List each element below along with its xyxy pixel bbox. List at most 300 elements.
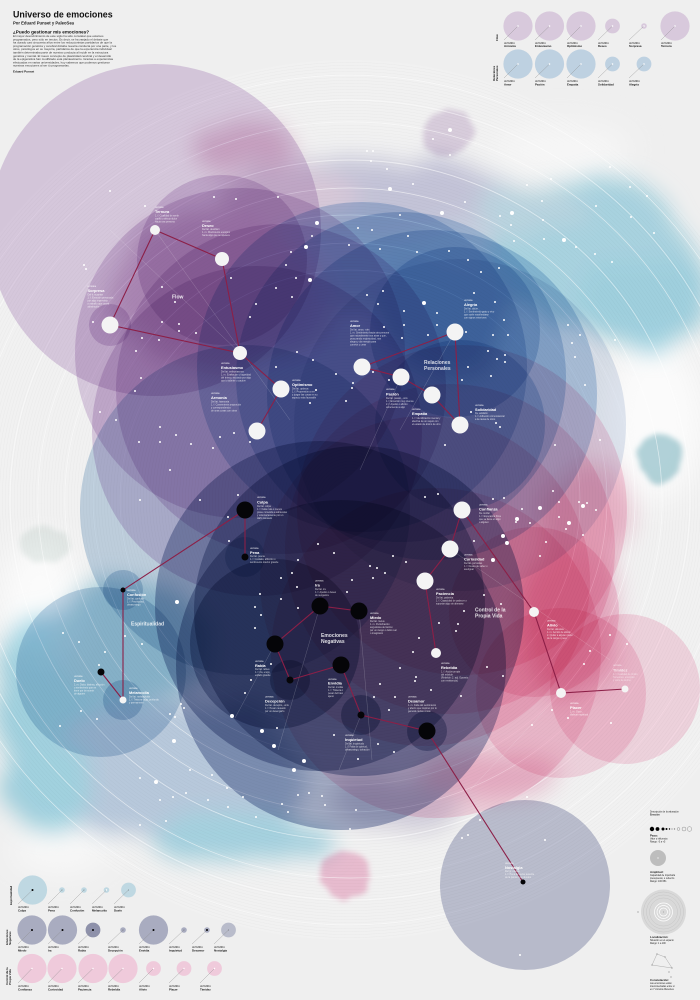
label: Inquietud: 1. f. Falta de quietud, bbox=[345, 746, 368, 748]
label: Amor: convivir y crear bbox=[350, 344, 366, 346]
label: Duelo: 1. m. Dolor, lástima, aflicción bbox=[74, 684, 105, 686]
label: Nostalgia: Nostalgia bbox=[505, 865, 523, 870]
label: Inquietud bbox=[345, 734, 370, 752]
label: Miedo: angustiosa del ánimo bbox=[370, 626, 393, 629]
row label: Control de la Propia Vida: Control de la bbox=[5, 967, 9, 985]
label: Alegría: LEYENDA bbox=[464, 299, 473, 302]
label: Melancolía: Del lat. melancholia bbox=[129, 696, 151, 698]
negativas mini labels: LEYENDA bbox=[48, 946, 59, 949]
label: Optimismo: LEYENDA bbox=[292, 379, 301, 382]
label: Curiosidad: Curiosidad bbox=[464, 556, 485, 562]
espiritualidad mini labels: Melancolía bbox=[92, 908, 107, 912]
label: Melancolía: y permanente bbox=[129, 702, 144, 704]
label: Rabia: LEYENDA bbox=[255, 660, 264, 663]
negativas mini labels: LEYENDA bbox=[78, 946, 89, 949]
constellation note: interconectadas entre sí bbox=[650, 985, 675, 988]
row label: Relaciones Personales: Relaciones bbox=[492, 66, 496, 81]
flow mini labels: LEYENDA bbox=[629, 42, 640, 45]
amplitude circle bbox=[650, 850, 666, 866]
label: Culpa: y voluntariamente por un bbox=[257, 514, 284, 517]
negativas mini labels: LEYENDA bbox=[192, 946, 203, 949]
negativas mini labels: Miedo bbox=[18, 948, 27, 952]
negativas mini labels: LEYENDA bbox=[169, 946, 180, 949]
label: Culpa: Del lat. culpa bbox=[257, 505, 271, 508]
label: Desamor: LEYENDA bbox=[408, 696, 417, 698]
negativas mini labels: LEYENDA bbox=[214, 946, 225, 949]
label: Relaciones Personales: Personales bbox=[424, 366, 451, 372]
constellation note: Las emociones están bbox=[650, 982, 672, 985]
label: Alegría: Del lat. alicer bbox=[464, 308, 478, 310]
label: Paciencia bbox=[436, 588, 467, 606]
circles: flow bbox=[0, 64, 446, 596]
relaciones mini labels: Pasión bbox=[535, 82, 545, 86]
label: Sorpresa: por algo imprevisto bbox=[88, 300, 108, 302]
title block bbox=[13, 10, 117, 74]
label: Deseo bbox=[202, 220, 231, 237]
label: Pena: 1. f. Cuidado, aflicción o bbox=[250, 558, 276, 561]
label: Amor: que naturalmente nos atrae y que, bbox=[350, 334, 387, 338]
label: Miedo bbox=[370, 612, 397, 635]
label: Ira: Ira bbox=[315, 582, 321, 588]
negativas mini labels bbox=[18, 946, 227, 952]
row label: Emociones Negativas: Negativas bbox=[8, 931, 12, 945]
legend: how to read bbox=[637, 810, 692, 991]
label: Amor: LEYENDA bbox=[350, 320, 359, 323]
label: Empatía: afectiva de un sujeto con bbox=[412, 420, 439, 423]
relaciones mini labels bbox=[504, 80, 640, 86]
label: Sorpresa: 1. f. Emoción provocada bbox=[88, 296, 114, 300]
label: Optimismo: Optimismo bbox=[292, 382, 313, 387]
label: Confusión: desasosiego bbox=[127, 604, 141, 606]
relaciones mini labels: LEYENDA bbox=[629, 80, 640, 83]
label: Envidia: Del lat. invidia bbox=[328, 686, 344, 689]
negativas mini labels: LEYENDA bbox=[18, 946, 29, 949]
flow note text: Rango: -5 a +5 bbox=[650, 842, 666, 844]
label: Envidia: pesar del bien bbox=[328, 692, 344, 695]
constellation: emociones negativas y espiritualidad bbox=[101, 510, 523, 882]
label: Confianza bbox=[479, 504, 502, 524]
espiritualidad mini labels: LEYENDA bbox=[114, 906, 125, 909]
star nodes bbox=[98, 225, 628, 884]
intro text: nuestras emociones al ser tú programarlas. bbox=[13, 64, 70, 68]
label: Deseo: 1. m. Movimiento enérgico bbox=[202, 231, 231, 234]
control mini labels: LEYENDA bbox=[78, 985, 89, 988]
label: Desamor bbox=[408, 696, 437, 713]
row label: Espiritualidad: Espiritualidad bbox=[9, 886, 13, 905]
label: Deseo: LEYENDA bbox=[202, 220, 211, 223]
label: Armonía: LEYENDA bbox=[211, 392, 220, 395]
flow mini labels: LEYENDA bbox=[504, 42, 515, 45]
label: Alivio: 2. Quitar a alguien parte bbox=[547, 634, 573, 637]
row label: Control de la Propia Vida: Propia Vida bbox=[8, 969, 12, 985]
control mini labels: LEYENDA bbox=[48, 985, 59, 988]
label: Placer: Placer bbox=[570, 705, 582, 710]
flow mini labels: Deseo bbox=[598, 44, 607, 48]
label: Sorpresa: o extraño que causa bbox=[88, 302, 110, 306]
label: Rebeldía bbox=[441, 662, 469, 682]
label: Flow: Flow bbox=[172, 294, 183, 300]
author: Eduard Punset bbox=[13, 70, 34, 74]
label: Confianza: LEYENDA bbox=[479, 504, 488, 506]
label: Ternura: LEYENDA bbox=[155, 206, 164, 209]
relaciones mini labels: Amor bbox=[504, 82, 512, 86]
circles: emociones negativas bbox=[155, 441, 610, 970]
flow mini labels: LEYENDA bbox=[567, 42, 578, 45]
intro text: ha durado casi cincuenta años entre los reduccionistas partidarios de que la bbox=[13, 41, 112, 45]
label: Decepción: 1. f. Pesar causado bbox=[265, 707, 286, 710]
constellation: flow bbox=[110, 230, 281, 431]
stars bbox=[60, 130, 654, 955]
label: Solidaridad: Solidaridad bbox=[475, 407, 497, 412]
label: Amor: Amor bbox=[350, 323, 361, 328]
row label: Flow: Flow bbox=[495, 34, 499, 41]
label: Optimismo: Del lat. optimus bbox=[292, 388, 309, 390]
label: Sorpresa: admiración bbox=[88, 306, 100, 308]
light rays from each circle to its label bbox=[110, 230, 610, 790]
relaciones mini circles bbox=[503, 49, 651, 79]
relaciones mini labels: Alegría bbox=[629, 82, 639, 86]
constellation: control de la propia vida bbox=[425, 510, 625, 693]
intro text: otros, psicólogos en su mayoría, partidarios de que la experiencia individual bbox=[13, 47, 112, 51]
label: Confianza: que se tiene en algo bbox=[479, 518, 501, 521]
label: Melancolía bbox=[129, 687, 159, 704]
label: Alegría: con signos exteriores bbox=[464, 316, 487, 320]
control mini labels: Placer bbox=[169, 988, 179, 992]
label: Placer bbox=[570, 702, 589, 716]
label: Espiritualidad: Espiritualidad bbox=[131, 622, 164, 628]
label: Ternura: cariño o afecto dulce bbox=[155, 218, 178, 220]
label: Solidaridad: a la causa de otros bbox=[475, 418, 496, 421]
label: Optimismo: aspecto más favorable bbox=[292, 396, 317, 400]
label: Alivio: LEYENDA bbox=[547, 620, 556, 622]
label: Pena: Pena bbox=[250, 550, 260, 555]
amplitude note: Capacidad de importarla bbox=[650, 874, 676, 877]
label: Alegría: que suele manifestarse bbox=[464, 314, 489, 316]
label: Duelo: LEYENDA bbox=[74, 675, 83, 678]
espiritualidad mini labels: LEYENDA bbox=[92, 906, 103, 909]
label: Ira: LEYENDA bbox=[315, 580, 324, 582]
label: Confusión: Confusión bbox=[127, 592, 147, 597]
label: Pena: sentimiento interior grande bbox=[250, 561, 279, 564]
label: Inquietud: Del lat. inquietudo bbox=[345, 742, 365, 746]
label: Miedo: 1. m. Perturbación bbox=[370, 623, 390, 626]
label: Placer: 1. m. Goce, bbox=[570, 710, 583, 714]
label: Entusiasmo: Del lat. enthusiasmus bbox=[221, 370, 245, 374]
label: Optimismo: y juzgar las cosas en su bbox=[292, 394, 318, 396]
intro text bbox=[13, 34, 117, 68]
flow mini labels: LEYENDA bbox=[598, 42, 609, 45]
label: Timidez: Timidez bbox=[613, 668, 627, 672]
label: Inquietud: LEYENDA bbox=[345, 734, 354, 737]
nodes: black emotions bbox=[98, 502, 526, 884]
relaciones mini labels: Solidaridad bbox=[598, 82, 614, 86]
label: Alivio: Alivio bbox=[547, 622, 558, 628]
negativas mini labels: Ira bbox=[48, 948, 52, 952]
label: Ira: 1. f. Apetito o deseo bbox=[315, 591, 337, 594]
label: Curiosidad bbox=[464, 554, 488, 571]
label: Paciencia: 1. f. Capacidad de padecer o bbox=[436, 600, 467, 602]
label: Rebeldía: LEYENDA bbox=[441, 662, 450, 665]
label: Pasión: Del lat. passio, -onis bbox=[386, 397, 408, 400]
label: Armonía: y correspondencia bbox=[211, 406, 231, 410]
flow mini labels: Entusiasmo bbox=[535, 44, 552, 48]
label: Desamor: 1. m. Falta del sentimiento bbox=[408, 704, 437, 707]
label: Paciencia: Del lat. patientia bbox=[436, 596, 454, 600]
amplitude note: Rango: 100-551 bbox=[650, 881, 667, 883]
label: Entusiasmo: LEYENDA bbox=[221, 362, 230, 365]
label: Culpa: Culpa bbox=[257, 500, 269, 504]
label: Alivio: Del lat. alleviare bbox=[547, 628, 565, 631]
relaciones mini labels: LEYENDA bbox=[598, 80, 609, 83]
label: Solidaridad: LEYENDA bbox=[475, 404, 484, 407]
label: Amor bbox=[350, 320, 390, 346]
legend: bottom left rows bbox=[5, 875, 236, 992]
label: Miedo: por un riesgo o daño real bbox=[370, 629, 397, 632]
label: Culpa: LEYENDA bbox=[257, 496, 266, 499]
label: Paciencia: soportar algo sin alterarse bbox=[436, 602, 464, 606]
relaciones mini labels: Empatía bbox=[567, 82, 579, 86]
label: Entusiasmo: que lo admire o cautive bbox=[221, 380, 246, 382]
label: Placer: LEYENDA bbox=[570, 702, 579, 705]
label: Confianza: o alguien bbox=[479, 521, 489, 524]
centres black large bbox=[32, 890, 207, 930]
label: Confianza: Confianza bbox=[479, 506, 498, 512]
label: Miedo: o imaginario bbox=[370, 632, 384, 635]
label: Envidia: LEYENDA bbox=[328, 678, 337, 681]
constellation sample bbox=[652, 954, 672, 977]
intro text: de la epigenética han modificado esta planteamiento. Gracias a experiencias bbox=[13, 57, 114, 61]
control mini labels: Confianza bbox=[18, 988, 32, 992]
label: Miedo: LEYENDA bbox=[370, 612, 379, 615]
label: Pasión: vehemente a algo bbox=[386, 406, 406, 409]
negativas mini labels: Desamor bbox=[192, 948, 205, 952]
control mini labels: Rebeldía bbox=[108, 988, 120, 992]
label: Curiosidad: LEYENDA bbox=[464, 554, 473, 556]
label: Miedo: Miedo bbox=[370, 615, 382, 620]
label: Optimismo: 1. f. Propensión a ver bbox=[292, 390, 315, 394]
espiritualidad mini labels: LEYENDA bbox=[70, 906, 81, 909]
label: Rabia: Del lat. rabies bbox=[255, 668, 270, 671]
label: Ternura bbox=[155, 206, 179, 224]
flow mini labels: Armonía bbox=[504, 44, 516, 48]
label: Empatía: Empatía bbox=[412, 411, 428, 416]
negativas mini labels: Inquietud bbox=[169, 948, 182, 952]
control mini labels: LEYENDA bbox=[169, 985, 180, 988]
label: Alivio bbox=[547, 620, 573, 640]
label: Melancolía: 1. f. Tristeza vaga, profunda bbox=[129, 698, 159, 702]
label: Timidez: y corto de ánimo bbox=[613, 679, 631, 682]
label: Entusiasmo: 1. m. Exaltación y fogosidad bbox=[221, 374, 252, 376]
label: Sorpresa: LEYENDA bbox=[88, 285, 97, 288]
control mini labels: Paciencia bbox=[78, 988, 92, 992]
flow mini labels: Ternura bbox=[661, 44, 672, 48]
label: Inquietud: Inquietud bbox=[345, 737, 363, 742]
label: Control de la Propia Vida: Control de la bbox=[475, 608, 506, 614]
label: Curiosidad: Del lat. curiositas bbox=[464, 562, 483, 565]
espiritualidad mini labels bbox=[18, 906, 125, 912]
label: Pasión: Pasión bbox=[386, 392, 399, 396]
label: Relaciones Personales: Relaciones bbox=[424, 360, 450, 366]
control mini labels bbox=[18, 985, 211, 992]
label: Pena: Del lat. poena bbox=[250, 555, 265, 558]
espiritualidad mini labels: LEYENDA bbox=[18, 906, 29, 909]
label: Paciencia: LEYENDA bbox=[436, 588, 445, 591]
label: Culpa: daño causado bbox=[257, 517, 273, 520]
circles: control de la propia vida bbox=[260, 345, 700, 818]
flow mini labels bbox=[504, 42, 672, 48]
label: Alegría bbox=[464, 299, 495, 320]
label: Decepción: Del lat. deceptio, -onis bbox=[265, 704, 289, 707]
title: Universo de emociones bbox=[13, 10, 113, 20]
label: Emociones Negativas: Negativas bbox=[321, 639, 345, 645]
label: Optimismo bbox=[292, 379, 318, 400]
legend heading: Descripción de la valoración bbox=[650, 812, 679, 814]
relaciones mini labels: LEYENDA bbox=[535, 80, 546, 83]
espiritualidad mini labels: Duelo bbox=[114, 908, 122, 912]
negativas mini labels: LEYENDA bbox=[139, 946, 150, 949]
intro text: programación genética y cerebral dictaba nuestra conducta por una parte, y los bbox=[13, 44, 117, 48]
label: Envidia: 1. f. Tristeza o bbox=[328, 689, 344, 692]
flow note text: Valor o influencia bbox=[650, 838, 667, 840]
label: Pena bbox=[250, 547, 279, 564]
legend: flow and relaciones personales bbox=[492, 11, 690, 86]
label: Decepción bbox=[265, 696, 289, 713]
amplitude note: presupuesto, o refuerzo bbox=[650, 877, 675, 880]
control mini labels: LEYENDA bbox=[200, 985, 211, 988]
negativas mini labels: Decepción bbox=[108, 948, 123, 952]
label: Culpa bbox=[257, 496, 288, 520]
label: Nostalgia: de la patria o los deudos bbox=[505, 876, 532, 879]
label: Nostalgia: LEYENDA bbox=[505, 862, 514, 865]
label: Rabia: Rabia bbox=[255, 663, 266, 668]
label: Solidaridad bbox=[475, 404, 505, 421]
label: Rebeldía: 1. f. Acción propia bbox=[441, 670, 461, 674]
label: Envidia: ajeno bbox=[328, 695, 335, 698]
label: Sorpresa bbox=[88, 285, 114, 308]
question heading: ¿Puedo gestionar mis emociones? bbox=[13, 30, 89, 34]
negativas mini circles bbox=[17, 915, 236, 945]
label: Sorpresa: Sorpresa bbox=[88, 288, 105, 293]
byline: Por Eduard Punset y PaleoSea bbox=[13, 20, 75, 26]
label: Alivio: de la carga o peso bbox=[547, 637, 567, 640]
label: Armonía: Armonía bbox=[211, 395, 228, 400]
label: Desamor: general ciertas cosas bbox=[408, 710, 431, 713]
label: Confusión: Del lat. confusio bbox=[127, 598, 145, 600]
control mini labels: Alivio bbox=[139, 988, 147, 992]
label: Emociones Negativas: Emociones bbox=[321, 633, 348, 639]
relaciones mini labels: LEYENDA bbox=[567, 80, 578, 83]
control mini labels: LEYENDA bbox=[139, 985, 150, 988]
espiritualidad mini labels: LEYENDA bbox=[48, 906, 59, 909]
label: Entusiasmo bbox=[221, 362, 252, 382]
leader lines bbox=[18, 890, 228, 983]
label: Armonía: 1. f. Conveniente proporción bbox=[211, 404, 242, 406]
label: Desamor: Desamor bbox=[408, 698, 425, 704]
flow mini labels: LEYENDA bbox=[661, 42, 672, 45]
negativas mini labels: LEYENDA bbox=[108, 946, 119, 949]
label: Confusión: LEYENDA bbox=[127, 589, 136, 592]
label: Confianza: De confiar bbox=[479, 512, 490, 515]
label: Timidez: LEYENDA bbox=[613, 664, 622, 667]
nodes: white emotions bbox=[102, 225, 628, 704]
label: Ternura: 1. f. Cualidad de sentir bbox=[155, 214, 179, 218]
label: Rabia: 1. f. Ira, enojo, bbox=[255, 671, 271, 674]
label: Amor: Del lat. amor, -oris bbox=[350, 328, 370, 332]
label: Rebeldía: Rebeldía bbox=[441, 665, 458, 670]
constellation lines bbox=[101, 230, 625, 882]
location note: Localización: bbox=[650, 935, 668, 939]
label: Nostalgia: 1. f. Pena de verse ausente bbox=[505, 873, 535, 876]
label: Rabia bbox=[255, 660, 271, 677]
label: Ternura: hacia una persona bbox=[155, 220, 175, 224]
label: Ira: Del lat. ira bbox=[315, 588, 326, 591]
control mini labels: Timidez bbox=[200, 988, 211, 992]
label: Inquietud: desasosiego, turbación bbox=[345, 748, 370, 752]
row label: Relaciones Personales: Personales bbox=[495, 65, 499, 81]
label: Amor: alegra y da energía para bbox=[350, 340, 377, 344]
label: Envidia bbox=[328, 678, 344, 698]
label: Timidez: Temeroso, encogido bbox=[613, 676, 635, 679]
label: Paciencia: Paciencia bbox=[436, 591, 455, 596]
label: Armonía: Del lat. harmonia bbox=[211, 400, 230, 404]
label: Armonía: de unas cosas con otras bbox=[211, 410, 238, 412]
label: Pasión bbox=[386, 388, 414, 409]
label: Deseo: hacia algo que se apetece bbox=[202, 234, 231, 237]
flow note: Pasa: bbox=[650, 834, 658, 838]
label: Placer: disfrute espiritual bbox=[570, 714, 589, 716]
label: Solidaridad: De solidario bbox=[475, 412, 488, 415]
negativas mini labels: Nostalgia bbox=[214, 948, 227, 952]
legend heading: Emoción bbox=[650, 814, 660, 816]
label: Duelo bbox=[74, 675, 105, 696]
control mini circles bbox=[17, 954, 222, 983]
label: Decepción: Decepción bbox=[265, 698, 285, 704]
emotion labels bbox=[74, 206, 638, 879]
label: Pena: LEYENDA bbox=[250, 547, 259, 550]
label: Timidez: 1. f. Cualidad de tímido bbox=[613, 673, 638, 676]
label: Empatía bbox=[412, 408, 441, 426]
espiritualidad mini labels: Pena bbox=[48, 908, 55, 912]
location note: Situación en el espacio bbox=[650, 939, 674, 942]
label: Empatía: LEYENDA bbox=[412, 408, 421, 411]
label: Amor: procurando reciprocidad, nos bbox=[350, 338, 382, 340]
label: Confusión bbox=[127, 589, 147, 606]
label: Culpa: grave cometida a sabiendas bbox=[257, 511, 288, 514]
flow mini labels: Optimismo bbox=[567, 44, 582, 48]
constellation note: en 7 círculos diferentes bbox=[650, 988, 675, 991]
espiritualidad mini labels: Culpa bbox=[18, 908, 26, 912]
label: Pasión: 2. f. Apetito o afición bbox=[386, 403, 408, 406]
label: Nostalgia: Del gr. nóstos bbox=[505, 870, 520, 873]
label: Culpa: 1. f. Falta más o menos bbox=[257, 508, 283, 511]
label: Ira: de venganza bbox=[315, 594, 329, 597]
circles: relaciones personales bbox=[197, 202, 626, 591]
constellation: relaciones personales bbox=[362, 332, 460, 425]
label: Armonía bbox=[211, 392, 242, 412]
watercolor washes bbox=[0, 108, 700, 900]
label: Confusión: 1. f. Perplejidad, bbox=[127, 600, 145, 604]
label: Ira bbox=[315, 580, 337, 597]
label: Rabia: enfado grande bbox=[255, 674, 271, 677]
label: Curiosidad: averiguar bbox=[464, 568, 474, 571]
label: Amor: 1. m. Sentimiento hacia otra persona bbox=[350, 332, 390, 334]
constellation note: Constelación: bbox=[650, 978, 669, 982]
negativas mini labels: Envidia bbox=[139, 948, 150, 952]
label: Envidia: Envidia bbox=[328, 680, 343, 686]
label: Desamor: y afecto que inspiran por lo bbox=[408, 707, 437, 710]
flow mini labels: Sorpresa bbox=[629, 44, 642, 48]
label: Decepción: por un desengaño bbox=[265, 710, 285, 713]
